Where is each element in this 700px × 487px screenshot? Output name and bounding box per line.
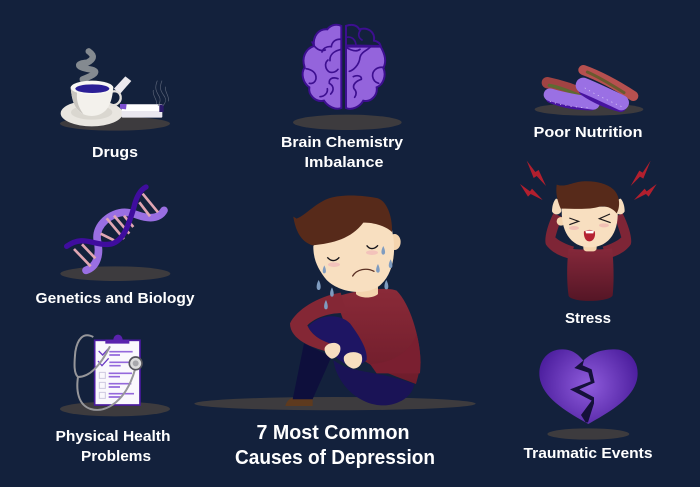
right folds xyxy=(346,30,384,97)
boxes xyxy=(99,372,105,398)
knee leg xyxy=(308,316,367,365)
mouth xyxy=(584,230,595,241)
lines xyxy=(109,352,134,397)
heart xyxy=(539,349,638,424)
checks xyxy=(98,348,109,366)
sweater body xyxy=(567,249,614,301)
icon: dna helix xyxy=(60,187,170,281)
lightning bolts xyxy=(520,161,657,200)
right hemisphere xyxy=(346,47,385,109)
sweater torso xyxy=(337,289,421,384)
shadow: brain xyxy=(293,115,402,130)
icon: broken heart xyxy=(539,349,638,440)
rungs xyxy=(74,194,158,266)
icon: hot dogs xyxy=(535,70,643,116)
saucer xyxy=(61,100,123,126)
mouth xyxy=(353,269,374,276)
tears xyxy=(317,246,392,309)
right empty top xyxy=(346,25,381,46)
cigarette xyxy=(120,104,164,118)
hair xyxy=(293,195,392,245)
label: brain chemistry: Brain Chemistry xyxy=(281,134,404,151)
stethoscope xyxy=(75,335,135,410)
title: Causes of Depression xyxy=(235,447,435,469)
cheeks xyxy=(328,262,340,267)
title: 7 Most Common xyxy=(256,422,410,444)
ear xyxy=(557,217,565,226)
hips xyxy=(333,360,414,405)
hot dog left xyxy=(547,83,593,108)
hot dog right xyxy=(583,70,633,107)
label: physical health: Physical Health xyxy=(56,428,170,445)
label: poor nutrition: Poor Nutrition xyxy=(534,124,642,141)
label: drugs: Drugs xyxy=(92,144,138,161)
shadow: drugs xyxy=(60,117,170,131)
face xyxy=(562,207,618,247)
label: physical health: Problems xyxy=(81,448,151,465)
ear xyxy=(389,234,401,250)
hair xyxy=(556,181,619,213)
dark strand xyxy=(67,187,146,246)
steam xyxy=(79,51,95,79)
eyes xyxy=(327,245,378,261)
label: genetics: Genetics and Biology xyxy=(36,290,195,307)
shoes xyxy=(285,398,313,406)
sweater arms xyxy=(545,213,574,259)
smoke xyxy=(153,81,169,106)
shadow: heart xyxy=(547,428,629,440)
main figure: sad sitting boy xyxy=(194,195,476,410)
label: brain chemistry: Imbalance xyxy=(304,154,384,171)
shadow: food xyxy=(535,103,643,116)
arm xyxy=(290,293,347,351)
back leg xyxy=(293,343,331,399)
standing cigarette xyxy=(114,76,131,94)
icon: coffee cup and cigarette xyxy=(60,51,170,131)
shadow: dna xyxy=(60,266,170,281)
eyes xyxy=(569,214,611,225)
crack xyxy=(570,360,595,422)
icon: clipboard and stethoscope xyxy=(60,335,170,416)
icon: stressed boy xyxy=(520,161,657,301)
face xyxy=(313,219,394,292)
cup handle xyxy=(107,91,121,105)
clip xyxy=(105,335,129,344)
clipboard xyxy=(95,340,140,405)
left hemisphere xyxy=(303,25,341,109)
label: traumatic events: Traumatic Events xyxy=(524,445,652,462)
light strand xyxy=(86,210,164,270)
shadow: clipboard xyxy=(60,402,170,416)
neck xyxy=(583,243,597,251)
icon: brain xyxy=(293,25,402,130)
cheeks xyxy=(569,226,579,230)
ground shadow xyxy=(194,397,476,410)
left folds xyxy=(306,39,341,97)
hands xyxy=(552,199,561,214)
hands xyxy=(325,343,340,359)
cup xyxy=(71,87,113,116)
label: stress: Stress xyxy=(565,310,611,327)
neck xyxy=(356,287,378,297)
